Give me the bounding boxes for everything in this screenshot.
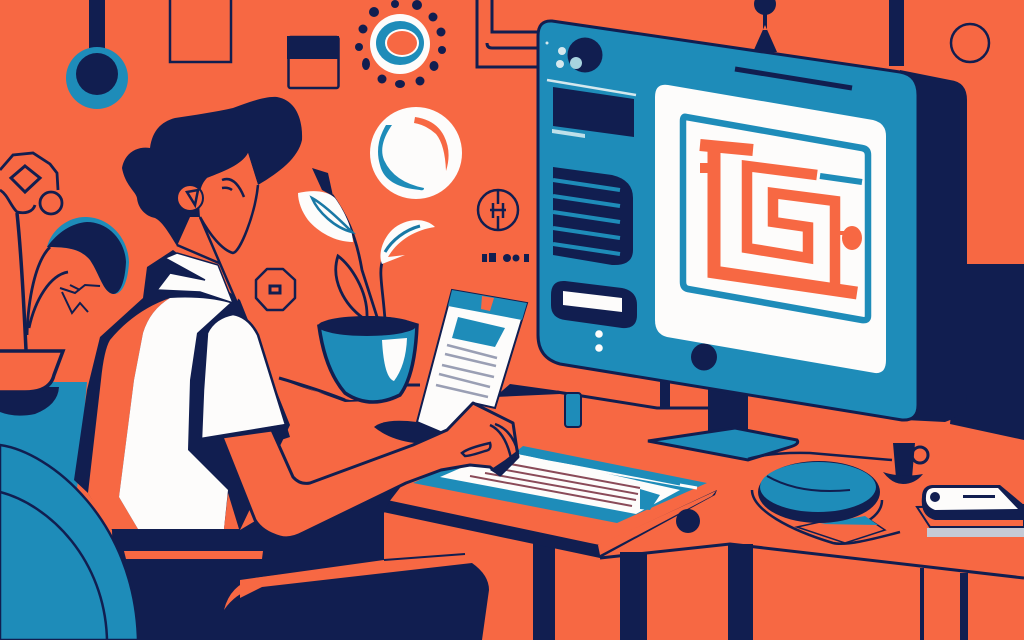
monitor back: [900, 70, 967, 422]
chair: [112, 480, 489, 640]
keyboard surface: [413, 446, 707, 523]
chair cushion: [232, 563, 489, 640]
monitor speaker slot: [735, 69, 852, 88]
wall lamp icon: [66, 0, 128, 109]
neck: [177, 215, 250, 303]
chair back and torso: [74, 250, 290, 530]
keyboard base: [389, 445, 717, 545]
chair seat: [112, 480, 406, 640]
hand shadow: [490, 450, 518, 476]
desk: [279, 378, 1024, 640]
octagon badge: [256, 269, 295, 310]
cushion highlight: [224, 555, 470, 610]
wall box icon: [287, 36, 339, 88]
small glyph marks: [482, 253, 529, 262]
top right decorations: [753, 0, 989, 66]
arm: [222, 403, 518, 538]
ear: [177, 185, 203, 211]
maze logo: [700, 143, 862, 293]
tablet: [374, 290, 527, 443]
maze logo dot: [842, 226, 862, 250]
dotted ring icon: [355, 0, 446, 88]
keyboard keys: [440, 452, 680, 514]
phone stack: [917, 485, 1024, 537]
wall frame: [170, 0, 231, 62]
monitor stand: [648, 375, 798, 460]
cable: [748, 453, 892, 460]
plant on left: [0, 153, 129, 350]
blue side area: [0, 382, 87, 500]
keyboard edge: [383, 490, 717, 558]
blue armchair: [0, 445, 138, 640]
collar: [157, 253, 233, 303]
hair: [122, 97, 302, 246]
flower pot: [279, 378, 395, 402]
sidebar items: [547, 80, 717, 370]
webcam: [546, 38, 602, 72]
fingers: [462, 424, 518, 458]
keyboard: [383, 445, 717, 558]
maze logo frame: [683, 117, 868, 320]
cuff: [262, 424, 290, 441]
screen white panel: [655, 85, 886, 373]
face: [199, 153, 258, 253]
cushion line: [384, 554, 465, 560]
sleeve: [201, 314, 286, 439]
person: [74, 97, 527, 538]
circuit lines on wall: [477, 0, 540, 67]
dark wall panel right: [950, 264, 1024, 440]
small wall badge: [478, 190, 518, 230]
monitor body: [538, 21, 918, 420]
desk disc: [752, 461, 900, 544]
chair stripe: [124, 551, 263, 559]
eye: [222, 179, 244, 197]
mug: [883, 443, 928, 484]
white ring icon: [370, 107, 462, 199]
plant on desk: [279, 168, 435, 402]
left flower pot: [0, 351, 63, 416]
monitor: [538, 21, 967, 460]
small desk device: [565, 393, 581, 427]
